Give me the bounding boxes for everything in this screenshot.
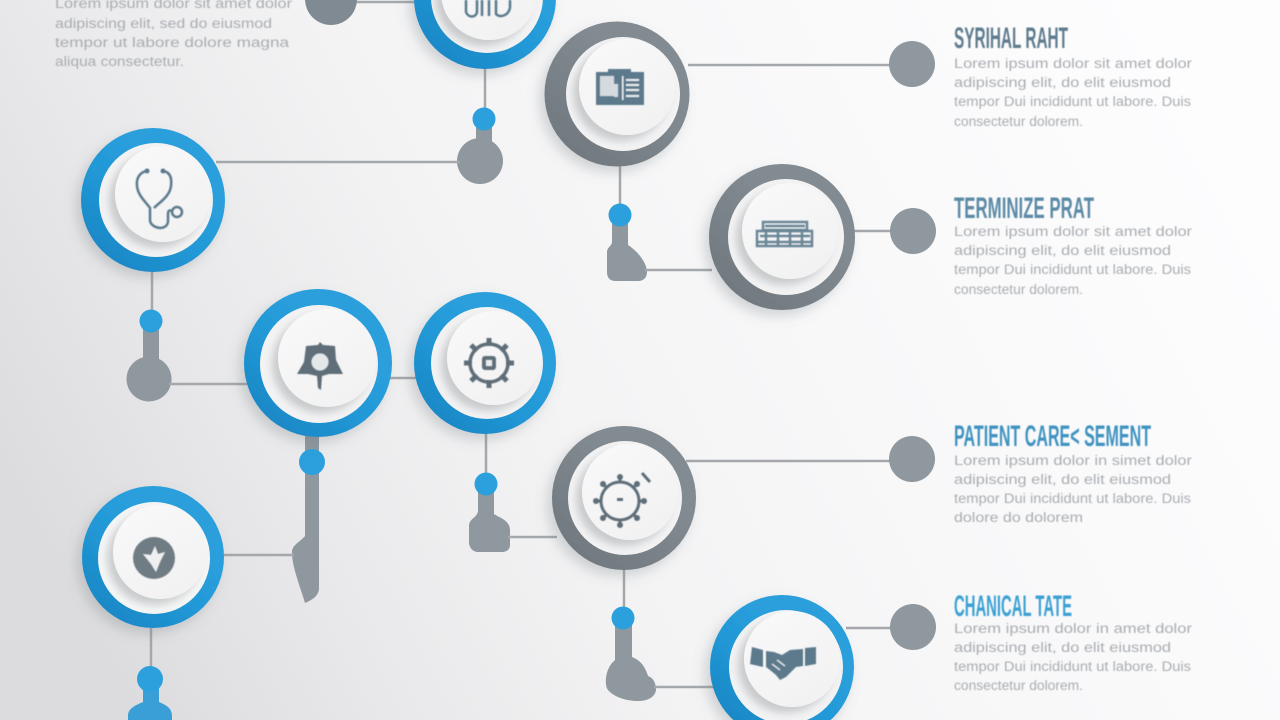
heading: TERMINIZE PRAT bbox=[954, 192, 1094, 225]
node: virus gray circle bbox=[552, 426, 696, 570]
node: handshake blue circle bbox=[710, 595, 854, 720]
text block: Chanical Tate: CHANICAL TATE bbox=[954, 590, 1072, 623]
body copy: adipiscing elit, do elit eiusmod bbox=[954, 243, 1171, 258]
body copy: Lorem ipsum dolor in simet dolor bbox=[954, 453, 1193, 468]
connector: virus node to handshake node bbox=[606, 568, 714, 701]
text block: Syrihal Raht bbox=[954, 22, 1193, 129]
connector: handshake node to right dot bbox=[846, 604, 936, 650]
body copy: consectetur dolorem. bbox=[954, 282, 1083, 297]
node: folder gray circle bbox=[544, 22, 690, 166]
connector: bell node to badge node bbox=[224, 432, 325, 603]
text block: Terminize Prat bbox=[954, 192, 1193, 297]
body copy bbox=[954, 453, 1193, 525]
body copy bbox=[954, 56, 1193, 129]
body copy: tempor Dui incididunt ut labore. Duis bbox=[954, 262, 1191, 277]
icon: blueprint folder bbox=[596, 69, 644, 105]
body copy: adipiscing elit, do elit eiusmod bbox=[954, 472, 1171, 487]
connector: gear node to virus node bbox=[469, 432, 557, 552]
node: stethoscope blue circle bbox=[81, 128, 225, 272]
icon: star badge bbox=[133, 537, 175, 579]
body copy: Lorem ipsum dolor in amet dolor bbox=[954, 621, 1193, 636]
text block: top left: tempor ut labore dolore magna bbox=[55, 35, 290, 50]
text block: top left: aliqua consectetur. bbox=[55, 54, 184, 69]
node: badge blue circle bbox=[82, 486, 224, 628]
text block: top left: adipiscing elit, sed do eiusmod bbox=[55, 16, 272, 31]
node: device gray circle bbox=[709, 164, 855, 310]
node: bell blue circle bbox=[244, 289, 392, 437]
node: gear blue circle bbox=[414, 292, 556, 434]
text block: Patient Care Sement bbox=[954, 420, 1193, 525]
icon: top partial icon bbox=[466, 0, 510, 16]
connector: top node to stethoscope node bbox=[216, 68, 503, 184]
body copy: consectetur dolorem. bbox=[954, 114, 1083, 129]
connector: device node to right dot bbox=[853, 208, 936, 254]
body copy: Lorem ipsum dolor sit amet dolor bbox=[954, 56, 1193, 71]
body copy: dolore do dolorem bbox=[954, 510, 1083, 525]
body copy: adipiscing elit, do elit eiusmod bbox=[954, 75, 1171, 90]
icon: gear bbox=[464, 338, 514, 388]
icon: handshake bbox=[750, 647, 816, 680]
body copy bbox=[954, 621, 1193, 693]
text block: top left bbox=[55, 0, 293, 69]
connector: badge node to bottom blue foot bbox=[128, 628, 172, 720]
connector: folder node to device node bbox=[607, 165, 712, 281]
body copy: Lorem ipsum dolor sit amet dolor bbox=[954, 224, 1193, 239]
connector: top left dot and line bbox=[305, 0, 416, 25]
body copy: consectetur dolorem. bbox=[954, 678, 1083, 693]
icon: bell bbox=[297, 342, 343, 390]
connector: folder node to right dot bbox=[688, 41, 935, 87]
connector: bell node to gear node bbox=[390, 377, 416, 379]
body copy: tempor Dui incididunt ut labore. Duis bbox=[954, 491, 1191, 506]
icon: stethoscope bbox=[137, 168, 182, 228]
connector network bbox=[126, 0, 936, 720]
body copy bbox=[954, 224, 1193, 297]
body copy: adipiscing elit, do elit eiusmod bbox=[954, 640, 1171, 655]
body copy: tempor Dui incididunt ut labore. Duis bbox=[954, 94, 1191, 109]
text block: Chanical Tate bbox=[954, 590, 1193, 693]
node: top blue circle bbox=[414, 0, 556, 69]
heading: SYRIHAL RAHT bbox=[954, 22, 1068, 55]
icon: virus bbox=[593, 473, 650, 528]
icon: medical device bbox=[757, 222, 812, 246]
connector: stethoscope node to bell node bbox=[126, 270, 247, 402]
body copy: tempor Dui incididunt ut labore. Duis bbox=[954, 659, 1191, 674]
connector: virus node to right dot bbox=[686, 436, 935, 482]
